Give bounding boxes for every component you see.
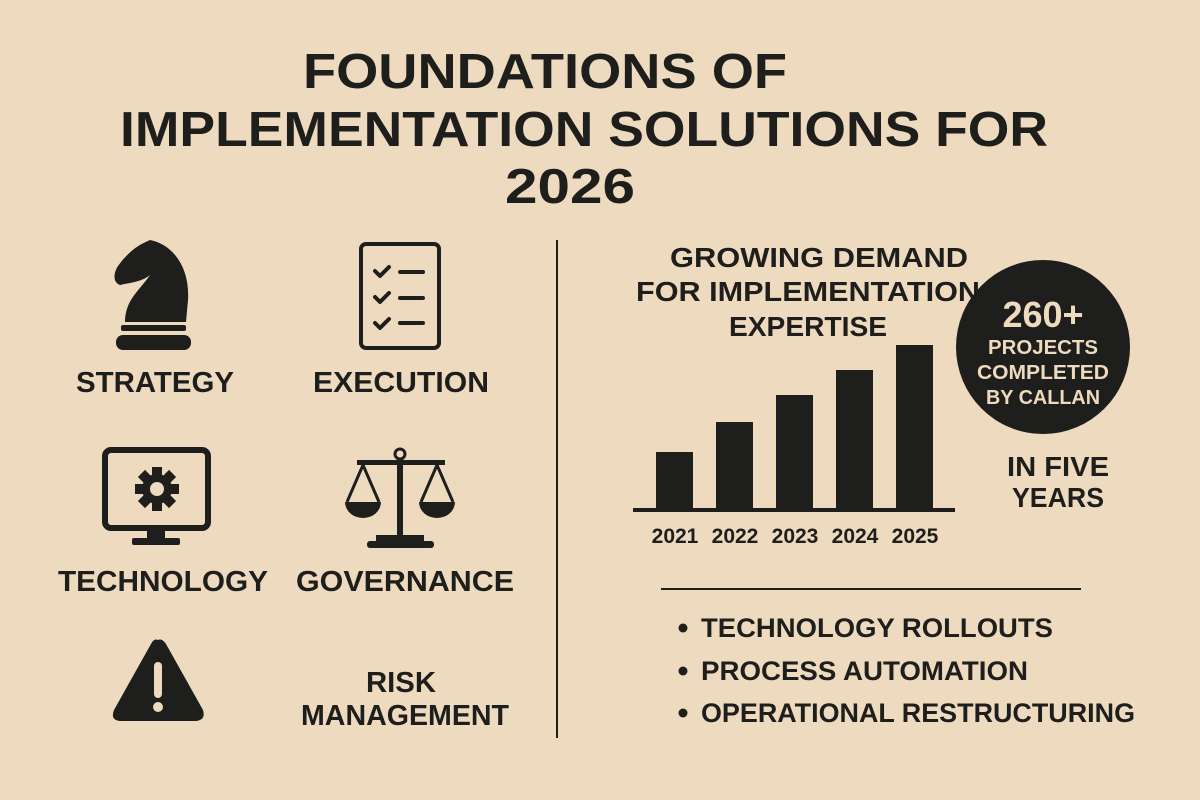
label: execution: EXECUTION (313, 367, 489, 399)
bar chart (633, 345, 955, 548)
label: governance: GOVERNANCE (296, 566, 514, 598)
title: 2026 (505, 160, 635, 214)
label: strategy: STRATEGY (76, 367, 234, 399)
bar chart: 2025 (892, 525, 939, 548)
chart heading: FOR IMPLEMENTATION (636, 276, 980, 307)
chart heading: EXPERTISE (729, 311, 887, 342)
callout circle: 260+: COMPLETED (977, 362, 1109, 384)
bar chart: 2021 (652, 525, 699, 548)
label: technology: TECHNOLOGY (58, 566, 268, 598)
label: risk management: MANAGEMENT (301, 700, 509, 732)
title: FOUNDATIONS OF (303, 45, 787, 99)
icon: scales (345, 449, 455, 548)
caption: in five years: YEARS (1012, 482, 1104, 513)
bullet list: OPERATIONAL RESTRUCTURING (701, 698, 1135, 728)
label: risk management (301, 667, 509, 732)
bar chart: 2023 (772, 525, 818, 548)
chart heading (636, 242, 980, 342)
callout circle: 260+: PROJECTS (988, 337, 1098, 359)
bar chart: 2024 (832, 525, 879, 548)
icon: warning triangle (113, 640, 204, 721)
bullet list: TECHNOLOGY ROLLOUTS (701, 613, 1053, 643)
title (120, 45, 1048, 214)
icon: checklist (361, 244, 439, 348)
icon: monitor with gear (105, 450, 208, 545)
callout circle: 260+: 260+ (1002, 294, 1084, 335)
callout circle: 260+: BY CALLAN (986, 387, 1100, 409)
title: IMPLEMENTATION SOLUTIONS FOR (120, 103, 1048, 157)
caption: in five years (1007, 451, 1109, 513)
bullet list: PROCESS AUTOMATION (701, 656, 1028, 686)
callout circle: 260+ (956, 260, 1130, 434)
chart heading: GROWING DEMAND (670, 242, 968, 273)
label: risk management: RISK (366, 667, 436, 699)
caption: in five years: IN FIVE (1007, 451, 1109, 482)
bar chart: 2022 (712, 525, 758, 548)
icon: chess knight (114, 240, 191, 350)
bullet list (678, 613, 1135, 728)
